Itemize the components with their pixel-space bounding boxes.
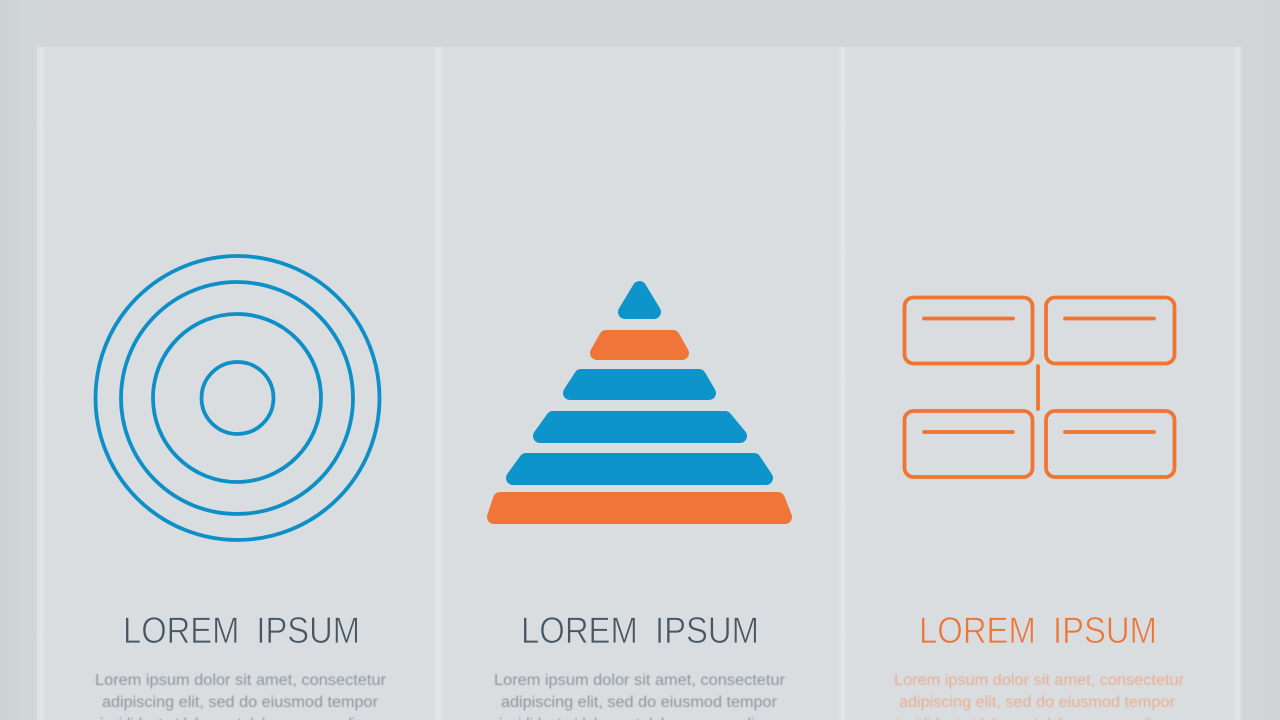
heading: center: LOREM IPSUM	[521, 610, 759, 651]
panel: concentric circles	[35, 47, 438, 720]
pyramid tier 2	[597, 337, 682, 353]
icon: pyramid	[494, 288, 785, 517]
icon: concentric circles	[96, 256, 380, 540]
pyramid tier 6	[494, 499, 785, 517]
box: bottom right	[1046, 411, 1174, 477]
heading: left: LOREM IPSUM	[123, 610, 360, 651]
panel: boxes	[837, 47, 1243, 720]
heading: right: LOREM IPSUM	[919, 610, 1157, 651]
pyramid tier 4	[540, 418, 740, 436]
text block: center	[494, 672, 785, 720]
text block: center: Lorem ipsum dolor sit amet, consectetur	[494, 672, 785, 689]
pyramid tier 1	[625, 288, 654, 312]
box: bottom left	[904, 411, 1032, 477]
text block: left	[95, 672, 386, 720]
pyramid tier 5	[513, 460, 766, 478]
pyramid tier 3	[570, 376, 709, 393]
text block: center: adipiscing elit, sed do eiusmod tempor	[501, 694, 777, 711]
icon: four boxes	[904, 298, 1174, 477]
box: top left	[904, 298, 1032, 364]
connector	[1036, 366, 1040, 409]
box: top right	[1046, 298, 1174, 364]
text block: right	[894, 672, 1184, 720]
text block: right: adipiscing elit, sed do eiusmod tempor	[899, 694, 1175, 711]
panel: pyramid	[433, 47, 840, 720]
text block: left: adipiscing elit, sed do eiusmod tempor	[102, 694, 378, 711]
text block: left: Lorem ipsum dolor sit amet, consectetur	[95, 672, 386, 689]
text block: right: Lorem ipsum dolor sit amet, consectetur	[894, 672, 1184, 689]
